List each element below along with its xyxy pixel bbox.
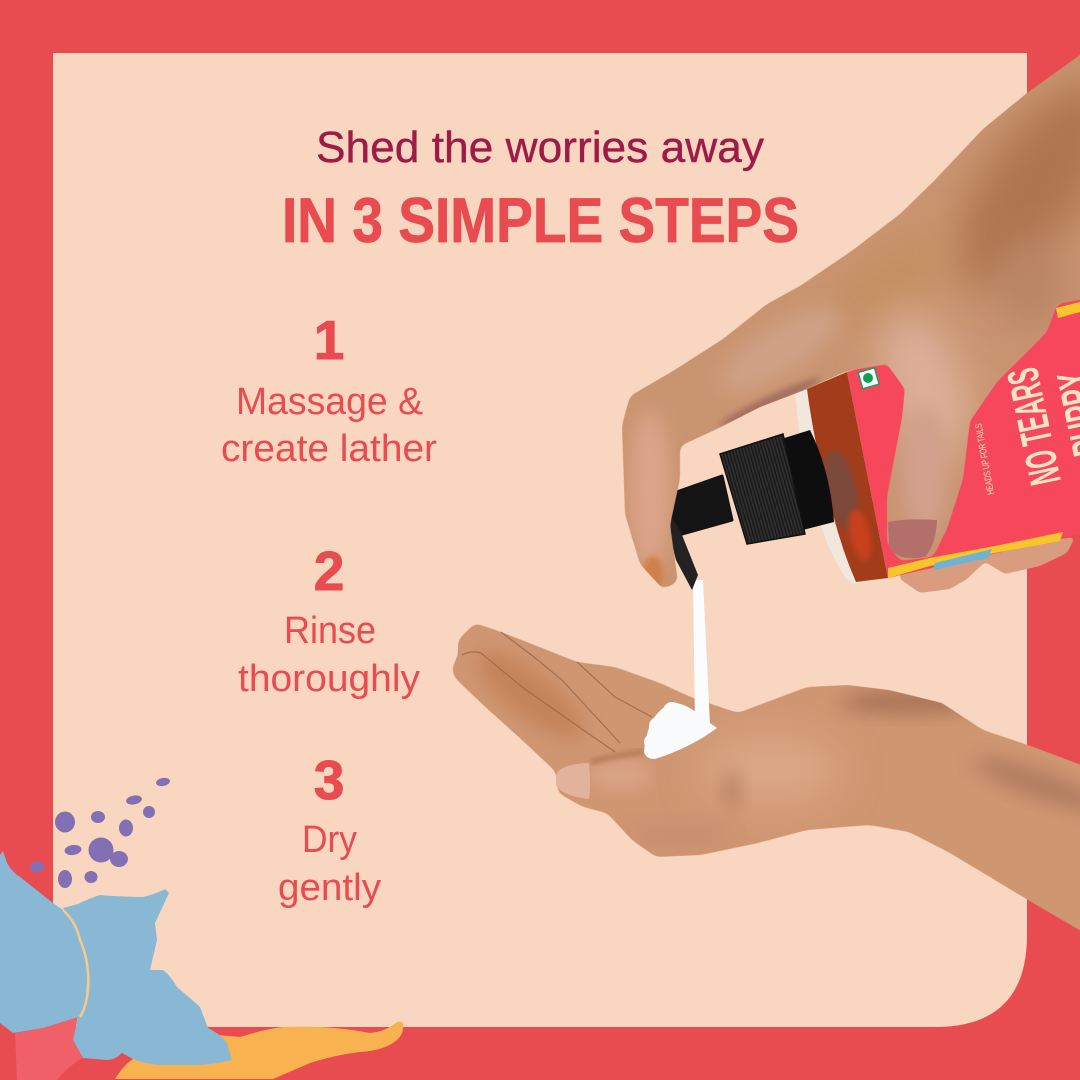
pump neck [778, 430, 834, 532]
step 3 [278, 749, 381, 909]
label trim: top [1056, 302, 1080, 318]
step 2: 2 [314, 540, 344, 602]
veg mark dot [863, 373, 873, 383]
bottle text: no tears: NO TEARS [998, 363, 1071, 489]
thumbnail [888, 519, 937, 558]
label trim: bottom [888, 532, 1063, 578]
step 1: 1 [314, 309, 344, 371]
pump collar [720, 434, 805, 544]
decoration: pink petal [15, 1016, 83, 1080]
soap stream [693, 580, 710, 725]
step 2 [238, 540, 420, 700]
step 2: thoroughly [238, 658, 420, 700]
thumbnail [556, 763, 590, 799]
lower hand [452, 623, 1080, 942]
step 1: create lather [221, 428, 437, 470]
decoration: orange petal [115, 1022, 403, 1079]
finger creases [462, 632, 652, 752]
step 1 [221, 309, 437, 470]
thumb shadow [590, 752, 645, 762]
pump [668, 430, 834, 590]
step 3: 3 [314, 749, 344, 811]
bottle text: brand: HEADS UP FOR TAILS [974, 423, 997, 495]
label trim: blue [933, 549, 992, 570]
soap foam [644, 702, 717, 759]
bottle label [847, 298, 1080, 578]
decoration: blue leaf left [0, 851, 87, 1033]
step 3: Dry [302, 819, 357, 861]
veg mark [858, 368, 879, 389]
pump nozzle [668, 476, 732, 534]
lower fingers behind bottle [900, 537, 1075, 593]
pump spout [668, 512, 698, 590]
decoration: blue leaf right [63, 889, 232, 1065]
upper hand [622, 40, 1080, 592]
heading: Shed the worries away: Shed the worries away [316, 123, 764, 172]
step 2: Rinse [284, 610, 376, 652]
bottle rim [795, 389, 887, 584]
step 3: gently [278, 867, 381, 909]
decoration: pale orange sliver [63, 910, 88, 1017]
step 1: Massage & [236, 381, 423, 423]
heading: IN 3 SIMPLE STEPS: IN 3 SIMPLE STEPS [282, 186, 799, 256]
bottle [795, 298, 1080, 584]
decoration: purple speckles [30, 777, 171, 888]
amber glass [807, 372, 888, 582]
